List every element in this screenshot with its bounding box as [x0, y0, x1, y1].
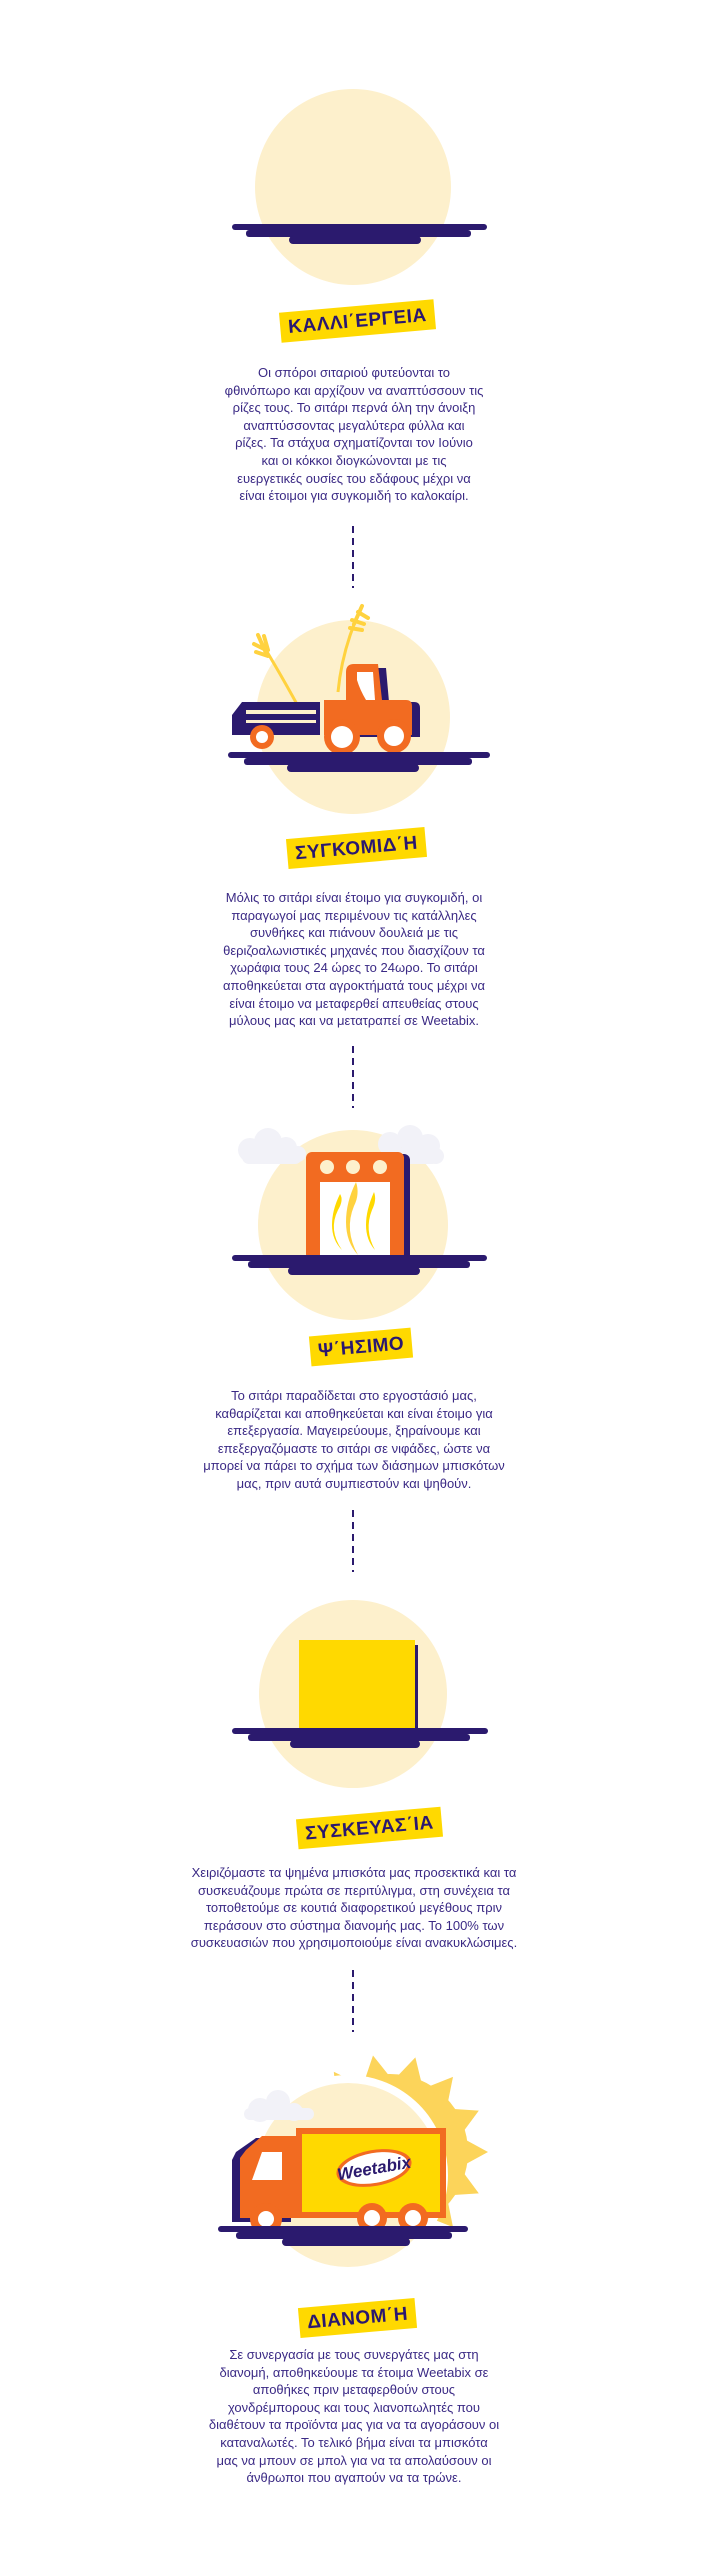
heading: ΣΥΓΚΟΜΙΔΗ: ΣΥΓΚΟΜΙΔ΄Η: [294, 833, 419, 864]
heading: ΔΙΑΝΟΜΗ: [298, 2298, 417, 2338]
text block: distribution: [209, 2347, 499, 2485]
heading: ΣΥΣΚΕΥΑΣΙΑ: ΣΥΣΚΕΥΑΣ΄ΙΑ: [304, 1812, 434, 1845]
heading: ΨΗΣΙΜΟ: [309, 1328, 413, 1366]
text block: cultivation: και οι κόκκοι διογκώνονται με τις: [262, 453, 446, 468]
text block: distribution: μας να μπουν σε μπολ για να τα απολαύσουν οι: [216, 2453, 492, 2468]
text block: distribution: αποθήκες πριν μεταφερθούν στους: [253, 2382, 455, 2397]
text block: baking: μπορεί να πάρει το σχήμα των διάσημων μπισκότων: [203, 1458, 505, 1473]
text block: distribution: διανομή, αποθηκεύουμε τα έτοιμα Weetabix σε: [220, 2365, 488, 2380]
arrow: dashed connector 3: [352, 1510, 354, 1572]
text block: packaging: [191, 1865, 517, 1950]
text block: harvest: παραγωγοί μας περιμένουν τις κατάλληλες: [231, 908, 477, 923]
text block: distribution: Σε συνεργασία με τους συνεργάτες μας στη: [229, 2347, 479, 2362]
icon: cultivation (sun circle with ground): [232, 89, 487, 285]
heading: ΚΑΛΛΙΕΡΓΕΙΑ: ΚΑΛΛΙ΄ΕΡΓΕΙΑ: [287, 305, 428, 338]
text block: baking: μας, πριν αυτά συμπιεστούν και ψηθούν.: [237, 1476, 471, 1491]
icon: distribution truck with sun: Weetabix: [336, 2152, 414, 2184]
text block: baking: [203, 1388, 505, 1491]
text block: harvest: είναι έτοιμο να μεταφερθεί απευθείας στους: [229, 996, 479, 1011]
text block: harvest: αποθηκεύεται στα αγροκτήματά τους μέχρι να: [223, 978, 485, 993]
icon: harvest tractor: [228, 604, 490, 814]
text block: distribution: καταναλωτές. Το τελικό βήμα είναι τα μπισκότα: [220, 2435, 488, 2450]
arrow: dashed connector 4: [352, 1970, 354, 2032]
text block: cultivation: ρίζες. Τα στάχυα σχηματίζονται τον Ιούνιο: [235, 435, 473, 450]
heading: ΨΗΣΙΜΟ: Ψ΄ΗΣΙΜΟ: [317, 1333, 405, 1362]
text block: baking: καθαρίζεται και αποθηκεύεται και είναι έτοιμο για: [215, 1406, 493, 1421]
text block: cultivation: είναι έτοιμοι για συγκομιδή το καλοκαίρι.: [239, 488, 469, 503]
arrow: dashed connector 1: [352, 526, 354, 588]
heading: ΣΥΣΚΕΥΑΣΙΑ: [296, 1807, 443, 1849]
text block: cultivation: φθινόπωρο και αρχίζουν να αναπτύσσουν τις: [225, 383, 483, 398]
text block: harvest: [223, 890, 485, 1028]
text block: packaging: τοποθετούμε σε κουτιά διαφορετικού μεγέθους πριν: [206, 1900, 502, 1915]
text block: harvest: συνθήκες και πιάνουν δουλειά με τις: [250, 925, 458, 940]
text block: harvest: μύλους μας και να μετατραπεί σε Weetabix.: [229, 1013, 479, 1028]
heading: ΚΑΛΛΙΕΡΓΕΙΑ: [279, 299, 436, 343]
text block: harvest: χωράφια τους 24 ώρες το 24ωρο. Το σιτάρι: [230, 960, 478, 975]
icon: distribution truck with sun: [218, 2056, 488, 2267]
text block: cultivation: ρίζες τους. Το σιτάρι περνά όλη την άνοιξη: [233, 400, 475, 415]
text block: distribution: χονδρέμπορους και τους λιανοπωλητές που: [228, 2400, 480, 2415]
text block: cultivation: ευεργετικές ουσίες του εδάφους μέχρι να: [237, 471, 471, 486]
text block: harvest: Μόλις το σιτάρι είναι έτοιμο για συγκομιδή, οι: [226, 890, 482, 905]
text block: distribution: διαθέτουν τα προϊόντα μας για να τα αγοράσουν οι: [209, 2417, 499, 2432]
text block: packaging: περάσουν στο σύστημα διανομής μας. Το 100% των: [204, 1918, 504, 1933]
icon: baking oven: [232, 1125, 487, 1320]
text block: baking: επεξεργαζόμαστε το σιτάρι σε νιφάδες, ώστε να: [218, 1441, 490, 1456]
text block: baking: επεξεργασία. Μαγειρεύουμε, ξηραίνουμε και: [227, 1423, 481, 1438]
text block: cultivation: αναπτύσσοντας μεγαλύτερα φύλλα και: [243, 418, 465, 433]
text block: packaging: συσκευασιών που χρησιμοποιούμε είναι ανακυκλώσιμες.: [191, 1935, 517, 1950]
heading: ΔΙΑΝΟΜΗ: ΔΙΑΝΟΜ΄Η: [306, 2304, 409, 2333]
text block: packaging: Χειριζόμαστε τα ψημένα μπισκότα μας προσεκτικά και τα: [192, 1865, 516, 1880]
text block: cultivation: Οι σπόροι σιταριού φυτεύονται το: [258, 365, 450, 380]
heading: ΣΥΓΚΟΜΙΔΗ: [286, 827, 427, 869]
text block: cultivation: [225, 365, 483, 503]
text block: distribution: άνθρωποι που αγαπούν να τα τρώνε.: [247, 2470, 461, 2485]
icon: packaging box: [232, 1600, 488, 1788]
arrow: dashed connector 2: [352, 1046, 354, 1108]
text block: harvest: θεριζοαλωνιστικές μηχανές που διασχίζουν τα: [223, 943, 485, 958]
text block: baking: Το σιτάρι παραδίδεται στο εργοστάσιό μας,: [231, 1388, 477, 1403]
text block: packaging: συσκευάζουμε πρώτα σε περιτύλιγμα, στη συνέχεια τα: [198, 1883, 510, 1898]
